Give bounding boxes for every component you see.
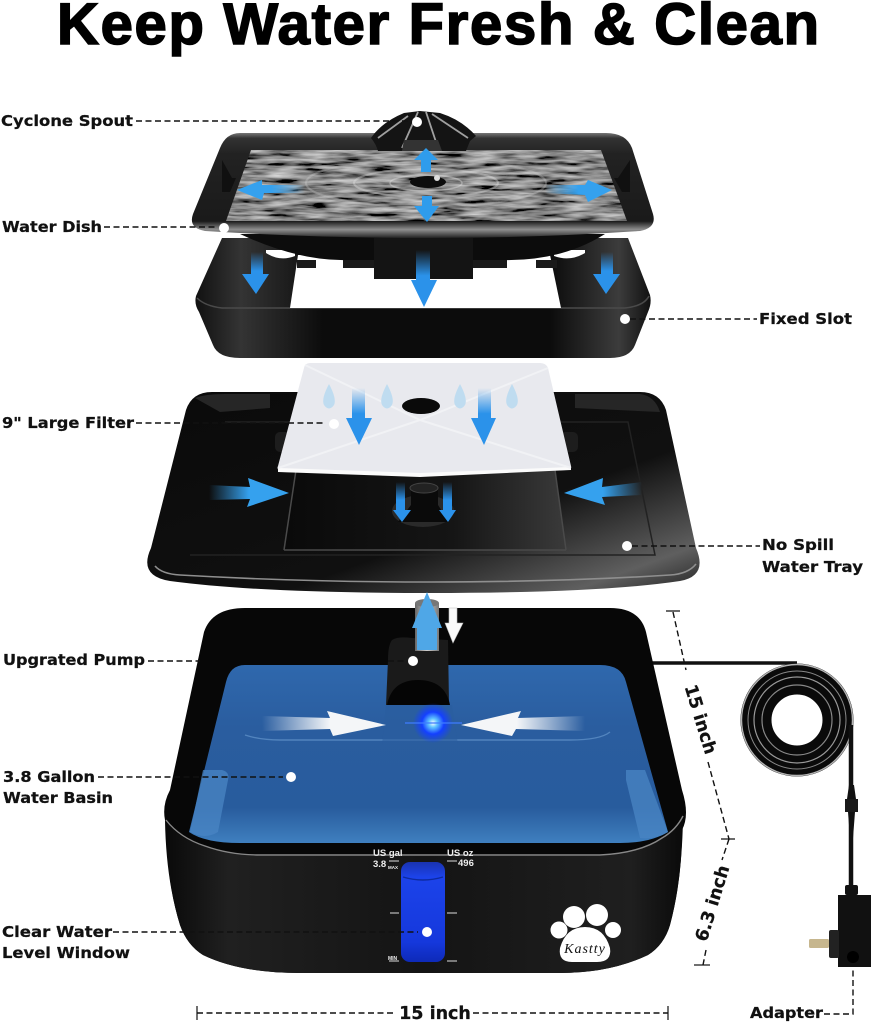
tray recess [284,470,566,550]
label: 9" Large Filter: 9" Large Filter [2,414,134,432]
basin inner ledges [190,770,228,836]
pump stem [392,495,454,527]
dimension: height 6.3 inch: 6.3 inch [692,863,734,944]
label: 9" Large Filter [2,414,339,432]
label: Adapter [750,968,853,1022]
label: Clear Water Level Window: Level Window [2,944,130,962]
window scale text: US gal [373,848,403,859]
label: Water Dish [2,218,229,236]
water level window [373,848,474,962]
label: 3.8 Gallon Water Basin: 3.8 Gallon [3,768,95,786]
label: Fixed Slot: Fixed Slot [759,310,853,328]
label: Cyclone Spout [1,112,422,130]
flow arrows: tray [209,478,642,522]
pump [382,592,463,745]
pump pipe [415,603,439,651]
water level window: MIN [388,956,398,962]
dimension: width 15 inch [197,1004,668,1024]
water level window: 3.8 [373,859,386,870]
label: Upgrated Pump [3,651,418,669]
label: Cyclone Spout: Cyclone Spout [1,112,134,130]
brand paw logo: Kastty [563,942,606,957]
brand paw logo [550,904,621,962]
tray posts [275,432,293,452]
label: Adapter: Adapter [750,1004,823,1022]
fixed slot frame [195,238,651,358]
label: No Spill Water Tray: No Spill [762,536,834,554]
water drops [323,384,335,408]
basin water [189,665,668,843]
pump LED [413,703,453,743]
dimension: depth 15 inch: 15 inch [680,682,720,757]
filter arrows [346,388,372,445]
no spill water tray [147,392,700,593]
dimension: width 15 inch: 15 inch [399,1004,471,1024]
filter [278,363,571,477]
label: Clear Water Level Window [2,923,432,962]
cyclone spout [371,111,476,151]
flow arrows: dish [237,148,620,307]
water dish [192,133,654,279]
label: No Spill Water Tray: Water Tray [762,558,863,576]
label: Water Dish: Water Dish [2,218,102,236]
label: Clear Water Level Window: Clear Water [2,923,112,941]
label: Fixed Slot [620,310,853,328]
dimension: height 6.3 inch [692,839,734,965]
inflow white arrows [262,711,585,736]
water level window: US oz [447,848,474,859]
dimension: depth 15 inch [666,611,735,839]
pump down arrow [445,608,463,643]
label: 3.8 Gallon Water Basin: Water Basin [3,789,113,807]
water basin body [164,608,686,973]
power cord and adapter [650,663,871,967]
water level window: 496 [458,858,474,869]
label: Upgrated Pump: Upgrated Pump [3,651,145,669]
dish water surface [222,148,632,224]
adapter body [838,895,871,967]
slot opening [290,255,561,308]
pump up arrow [412,592,442,650]
label: 3.8 Gallon Water Basin [3,768,296,807]
filter hole [402,398,440,414]
water level window: MAX [388,865,398,870]
label: No Spill Water Tray [622,536,863,576]
